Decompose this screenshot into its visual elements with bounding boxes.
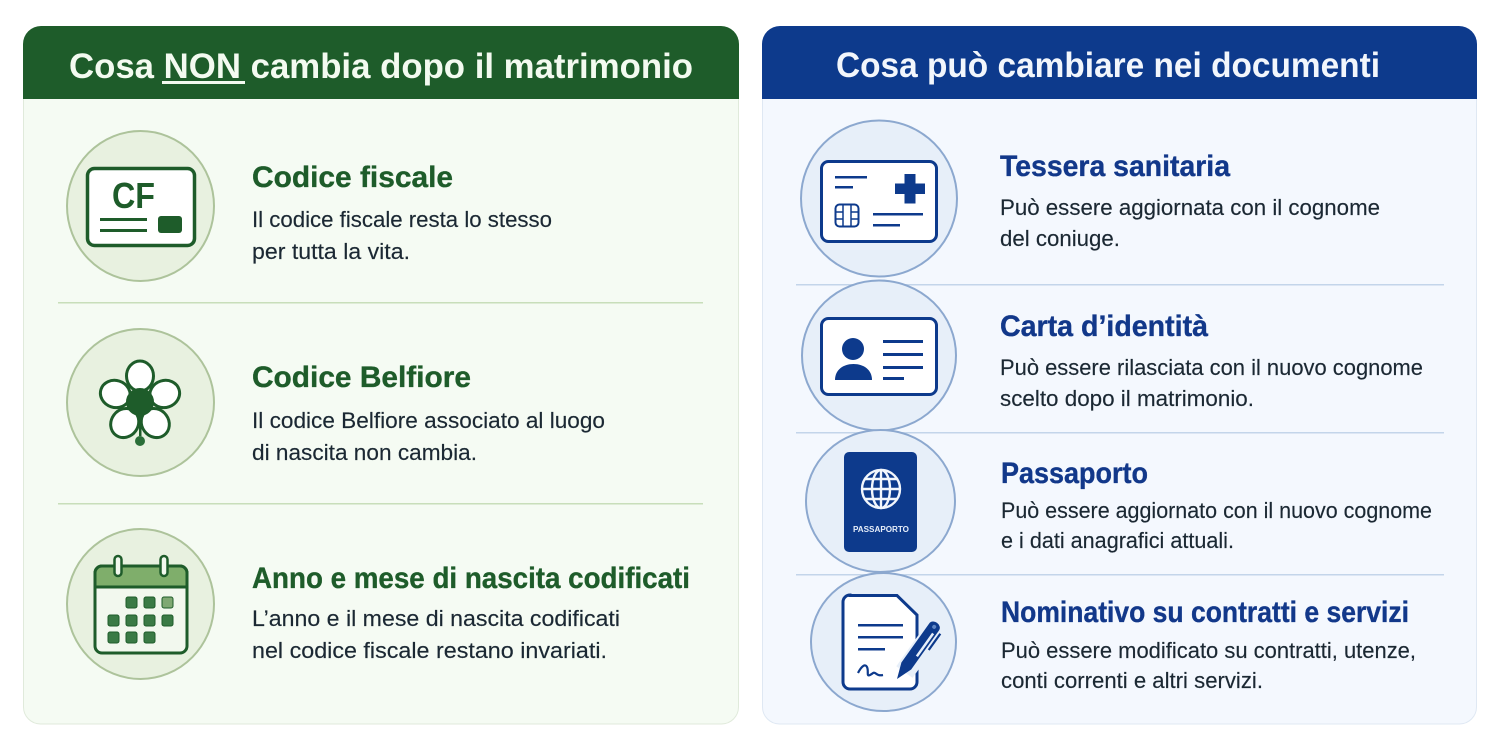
icon: CF card (67, 131, 214, 281)
description: carta d'identità: Può essere rilasciata con il nuovo cognome (1000, 355, 1423, 380)
title: passaporto: Passaporto (1001, 457, 1148, 490)
row: passaporto (806, 430, 1432, 572)
description: nominativo (1001, 638, 1416, 693)
row: carta d'identità (802, 280, 1423, 430)
description: tessera sanitaria: Può essere aggiornata con il cognome (1000, 195, 1380, 220)
row: anno e mese (67, 529, 690, 679)
description: nominativo: Può essere modificato su contratti, utenze, (1001, 638, 1416, 663)
description: passaporto: e i dati anagrafici attuali. (1001, 528, 1234, 553)
icon: passport: PASSAPORTO (853, 525, 909, 534)
panel: what can change (762, 26, 1477, 724)
icon: flower (67, 329, 214, 476)
row: nominativo (811, 573, 1416, 711)
description: anno e mese (252, 606, 620, 663)
description: codice belfiore: Il codice Belfiore associato al luogo (252, 408, 605, 433)
description: codice fiscale (252, 207, 552, 264)
icon: health card (801, 120, 957, 276)
heading: Cosa NON cambia dopo il matrimonio (69, 47, 693, 86)
title: anno e mese: Anno e mese di nascita codificati (252, 562, 690, 595)
description: codice belfiore: di nascita non cambia. (252, 440, 477, 465)
icon: signed document (811, 573, 956, 711)
icon: passport (806, 430, 955, 572)
description: carta d'identità (1000, 355, 1423, 411)
row: codice belfiore (67, 329, 605, 476)
title: carta d'identità: Carta d’identità (1000, 310, 1208, 343)
panel: what does not change (23, 26, 739, 724)
description: anno e mese: nel codice fiscale restano invariati. (252, 638, 607, 663)
description: nominativo: conti correnti e altri servizi. (1001, 668, 1263, 693)
icon: CF card: CF (112, 175, 155, 216)
title: tessera sanitaria: Tessera sanitaria (1000, 150, 1230, 183)
green header (23, 26, 739, 99)
description: codice fiscale: per tutta la vita. (252, 239, 410, 264)
row: tessera sanitaria (801, 120, 1380, 276)
title: codice belfiore: Codice Belfiore (252, 361, 471, 394)
title: nominativo: Nominativo su contratti e servizi (1001, 596, 1409, 629)
description: codice belfiore (252, 408, 605, 465)
icon: identity card (802, 280, 956, 430)
blue header (762, 26, 1477, 99)
description: passaporto: Può essere aggiornato con il nuovo cognome (1001, 498, 1432, 523)
description: passaporto (1001, 498, 1432, 553)
title: codice fiscale: Codice fiscale (252, 161, 453, 194)
description: tessera sanitaria (1000, 195, 1380, 251)
heading: Cosa può cambiare nei documenti (836, 46, 1380, 85)
description: anno e mese: L’anno e il mese di nascita codificati (252, 606, 620, 631)
description: codice fiscale: Il codice fiscale resta lo stesso (252, 207, 552, 232)
description: tessera sanitaria: del coniuge. (1000, 226, 1120, 251)
row: codice fiscale (67, 131, 552, 281)
description: carta d'identità: scelto dopo il matrimonio. (1000, 386, 1254, 411)
icon: calendar (67, 529, 214, 679)
